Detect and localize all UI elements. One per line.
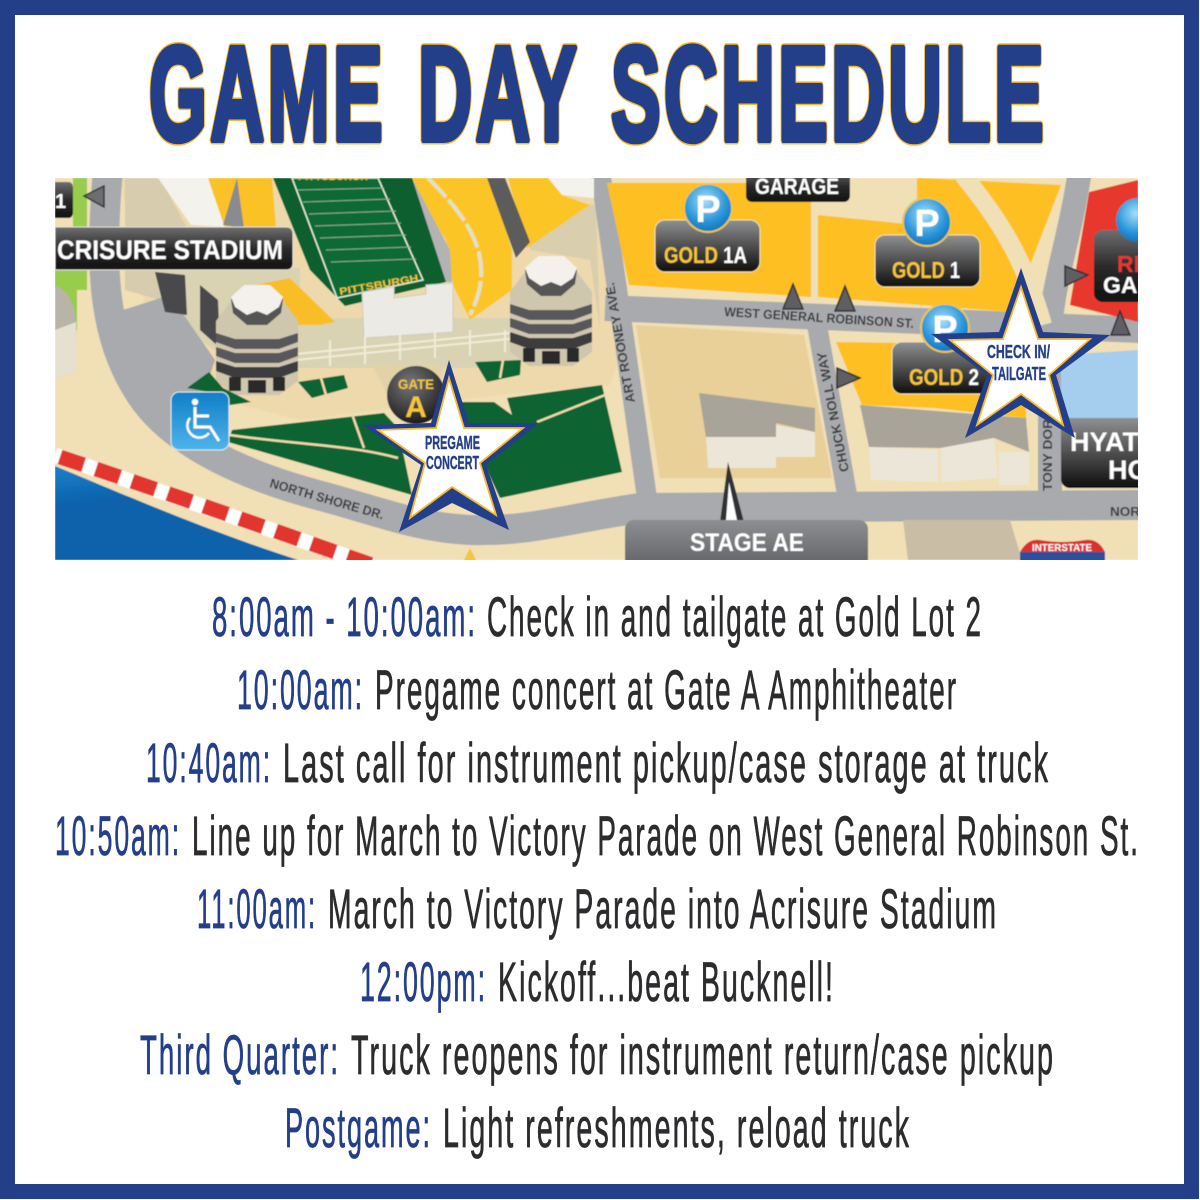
label: Gold 2: [892, 304, 997, 394]
schedule line 8: [285, 1096, 911, 1159]
title: DAY: [418, 20, 580, 169]
label: Gold 1A: [655, 184, 760, 272]
star callout: check in / tailgate: CHECK IN/: [987, 342, 1050, 362]
label: Acrisure Stadium: CRISURE STADIUM: [57, 235, 283, 265]
schedule line 5: 11:00am:: [197, 877, 317, 940]
icon: gate A: [387, 366, 445, 424]
street labels: NORTH SHORE DR.: [268, 475, 386, 522]
star callout: pregame concert: CONCERT: [426, 453, 479, 473]
label: garage: GARAGE: [755, 174, 839, 199]
football field: PITTSBURGH: [298, 172, 368, 183]
schedule line 7: [140, 1023, 1055, 1086]
label: Stage AE: [624, 462, 868, 560]
map base: [55, 178, 1138, 560]
label: Gold 1A: P: [695, 189, 721, 231]
stadium window blocks: [155, 272, 220, 348]
building: [699, 393, 815, 468]
white stadium roofs: [158, 178, 594, 228]
label: Hyatt hotel: HO: [1108, 455, 1148, 485]
sand stripe: [963, 175, 1043, 325]
label: Hyatt hotel: HYATT: [1070, 427, 1156, 457]
label: red garage: GAR: [1103, 272, 1154, 298]
shoreline stripes: [55, 455, 372, 565]
gold stands: [208, 178, 590, 325]
arrow markers: [783, 266, 1130, 388]
label: Gold 2: P: [932, 309, 958, 351]
tan block: [636, 325, 832, 478]
label: Gold 1: P: [914, 203, 940, 245]
label: top-left fragment: [55, 182, 73, 218]
schedule line 1: [212, 585, 983, 648]
street labels: WEST GENERAL ROBINSON ST.: [724, 304, 914, 331]
triangle marker: [463, 548, 477, 562]
schedule line 6: Kickoff...beat Bucknell!: [498, 950, 835, 1013]
label: Acrisure Stadium: [55, 227, 293, 270]
arrow: top-left: [84, 186, 104, 207]
schedule line 8: Postgame:: [285, 1096, 432, 1159]
interstate shield: [1020, 540, 1105, 562]
star callout: check in / tailgate: TAILGATE: [992, 364, 1046, 384]
lawn paths: [230, 360, 605, 458]
street labels: TONY DOR: [1040, 418, 1055, 491]
map of stadium area: [55, 170, 1161, 580]
street labels: ART ROONEY AVE.: [602, 281, 638, 404]
schedule line 1: 8:00am - 10:00am:: [212, 585, 477, 648]
schedule list: [55, 585, 1140, 1159]
schedule line 6: [360, 950, 835, 1013]
schedule line 4: 10:50am:: [55, 804, 181, 867]
star callout: pregame concert: [362, 360, 539, 532]
label: red garage: [1093, 197, 1138, 303]
star callout: check in / tailgate: [931, 268, 1110, 438]
label: Gold 1: GOLD 1: [892, 257, 960, 283]
lawns: [187, 360, 622, 498]
lower tan area: [903, 520, 1022, 560]
building east: [860, 405, 1029, 485]
street labels: [268, 281, 1141, 522]
tower right: [510, 256, 592, 366]
schedule line 3: 10:40am:: [146, 731, 272, 794]
title: GAME: [149, 20, 386, 169]
title: [149, 20, 1047, 169]
schedule line 7: Third Quarter:: [140, 1023, 340, 1086]
label: Gold 2: GOLD 2: [909, 364, 979, 390]
scoreboard building: [362, 283, 453, 338]
street labels: CHUCK NOLL WAY: [814, 350, 852, 473]
street labels: NOR: [1110, 504, 1141, 519]
label: Hyatt hotel: [1060, 417, 1138, 489]
label: garage: [745, 178, 851, 203]
football field: [273, 172, 446, 306]
label: red garage: RE: [1117, 251, 1149, 277]
schedule line 2: 10:00am:: [237, 658, 364, 721]
schedule line 6: 12:00pm:: [360, 950, 487, 1013]
icon: gate A: GATE: [398, 376, 434, 392]
left green patch and grey structure: [55, 178, 87, 378]
light blue area: [1061, 350, 1138, 418]
label: top-left fragment: 1: [55, 191, 66, 213]
grey lot: [124, 298, 216, 407]
tower left: [216, 285, 298, 395]
interstate shield: INTERSTATE: [1032, 543, 1092, 554]
icon: wheelchair access: [171, 392, 229, 450]
star callout: pregame concert: PREGAME: [425, 433, 480, 453]
water: [55, 466, 298, 560]
label: Stage AE: STAGE AE: [690, 529, 804, 557]
schedule line 2: [237, 658, 958, 721]
roads: [104, 170, 1140, 530]
gold lots: [607, 178, 1061, 418]
schedule line 5: [197, 877, 998, 940]
red lot: [1070, 180, 1138, 322]
title: GAME: [149, 20, 386, 169]
stadium grounds: [120, 178, 625, 420]
football field: PITTSBURGH: [339, 273, 419, 298]
label: Gold 1A: GOLD 1A: [664, 242, 747, 268]
title: DAY: [418, 20, 580, 169]
icon: gate A: A: [405, 391, 427, 424]
label: Gold 1: [875, 198, 980, 287]
plaza railing: [296, 330, 518, 366]
